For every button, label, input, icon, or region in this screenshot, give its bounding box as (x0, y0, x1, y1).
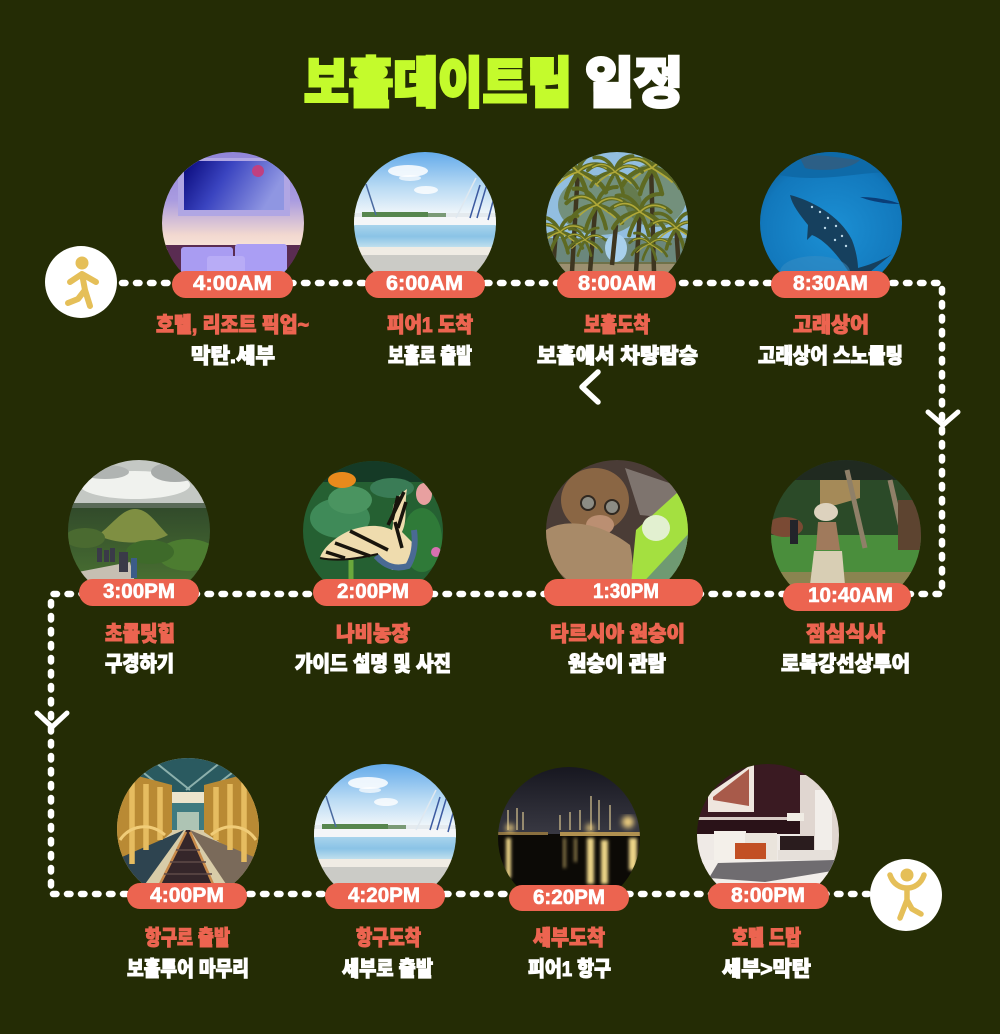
time pill (557, 271, 676, 298)
place name: 피어1 도착 (387, 314, 473, 337)
time label: 6:20PM (533, 886, 605, 909)
time label: 2:00PM (337, 580, 409, 603)
place name: 호텔, 리조트 픽업~ (156, 314, 309, 337)
time label: 4:20PM (348, 884, 420, 907)
description: 막탄.세부 (191, 345, 275, 368)
photo: whale shark (760, 152, 902, 272)
description: 보홀에서 차량탑승 (537, 345, 698, 368)
description: 피어1 항구 (528, 958, 611, 981)
time pill (771, 271, 890, 298)
description: 보홀투어 마무리 (127, 958, 249, 981)
arrow: down right side (928, 412, 958, 425)
description: 로복강선상투어 (781, 653, 910, 676)
time label: 3:00PM (103, 580, 175, 603)
time label: 8:30AM (793, 272, 868, 295)
stop: 6:20PM Cebu arrival (495, 765, 643, 981)
description: 구경하기 (105, 653, 174, 676)
time pill (313, 579, 433, 606)
place name: 세부도착 (533, 927, 605, 950)
description: 원숭이 관람 (568, 653, 666, 676)
time pill (708, 883, 829, 909)
photo: village performer (771, 460, 921, 585)
description: 세부>막탄 (722, 958, 811, 981)
place name: 호텔 드랍 (732, 927, 801, 950)
time pill (79, 579, 199, 606)
time label: 4:00PM (150, 884, 224, 907)
icon: finish jumper (870, 859, 942, 931)
description: 가이드 설명 및 사진 (295, 653, 451, 676)
photo: railway bridge (117, 758, 259, 883)
time label: 1:30PM (593, 580, 659, 603)
stop: 8:30AM whale shark (755, 150, 910, 368)
photo: hotel room (162, 152, 304, 272)
stop: 3:00PM chocolate hills (65, 458, 218, 676)
time pill (172, 271, 293, 298)
icon: start walker (45, 246, 117, 318)
place name: 보홀도착 (584, 314, 650, 337)
dotted route line (51, 283, 942, 894)
description: 고래상어 스노클링 (758, 345, 903, 368)
time pill (544, 579, 703, 606)
place name: 점심식사 (806, 623, 885, 646)
stop: 4:20PM port arrival (310, 762, 460, 981)
stop: 2:00PM butterfly farm (295, 458, 451, 676)
time label: 4:00AM (193, 272, 272, 295)
time label: 10:40AM (808, 584, 893, 607)
stop: 8:00AM Bohol arrival (533, 148, 703, 368)
time label: 6:00AM (386, 272, 463, 295)
title: 보홀데이트립 (304, 54, 572, 114)
photo: harbor (314, 764, 456, 884)
time pill (783, 583, 911, 611)
time pill (509, 885, 629, 911)
place name: 항구도착 (356, 927, 421, 950)
description: 보홀로 출발 (388, 345, 472, 368)
stop: 4:00AM hotel pickup (156, 150, 309, 368)
arrow: down left side (37, 713, 67, 727)
photo: chocolate hills (68, 460, 210, 580)
photo: night harbor (498, 767, 640, 886)
stop: 10:40AM lunch and Loboc river (767, 458, 924, 676)
stop: 8:00PM hotel drop-off (695, 762, 842, 981)
stop: 1:30PM tarsier (542, 458, 703, 676)
stop: 6:00AM pier (350, 150, 500, 368)
photo: butterfly (303, 461, 443, 580)
place name: 고래상어 (793, 314, 869, 337)
title: 일정 (585, 54, 683, 114)
photo: tarsier (546, 460, 688, 579)
arrow: left middle (582, 372, 598, 402)
place name: 항구로 출발 (145, 927, 230, 950)
photo: palm trees (546, 152, 688, 272)
time pill (325, 883, 445, 909)
place name: 초콜릿힐 (105, 623, 175, 646)
time label: 8:00PM (731, 884, 805, 907)
photo: harbor (354, 152, 496, 272)
time pill (127, 883, 247, 909)
description: 세부로 출발 (342, 958, 433, 981)
stop: 4:00PM depart to port (115, 756, 261, 981)
place name: 타르시아 원숭이 (550, 623, 685, 646)
place name: 나비농장 (336, 623, 410, 646)
time label: 8:00AM (578, 272, 656, 295)
photo: hotel bedroom (697, 764, 839, 884)
time pill (365, 271, 485, 298)
